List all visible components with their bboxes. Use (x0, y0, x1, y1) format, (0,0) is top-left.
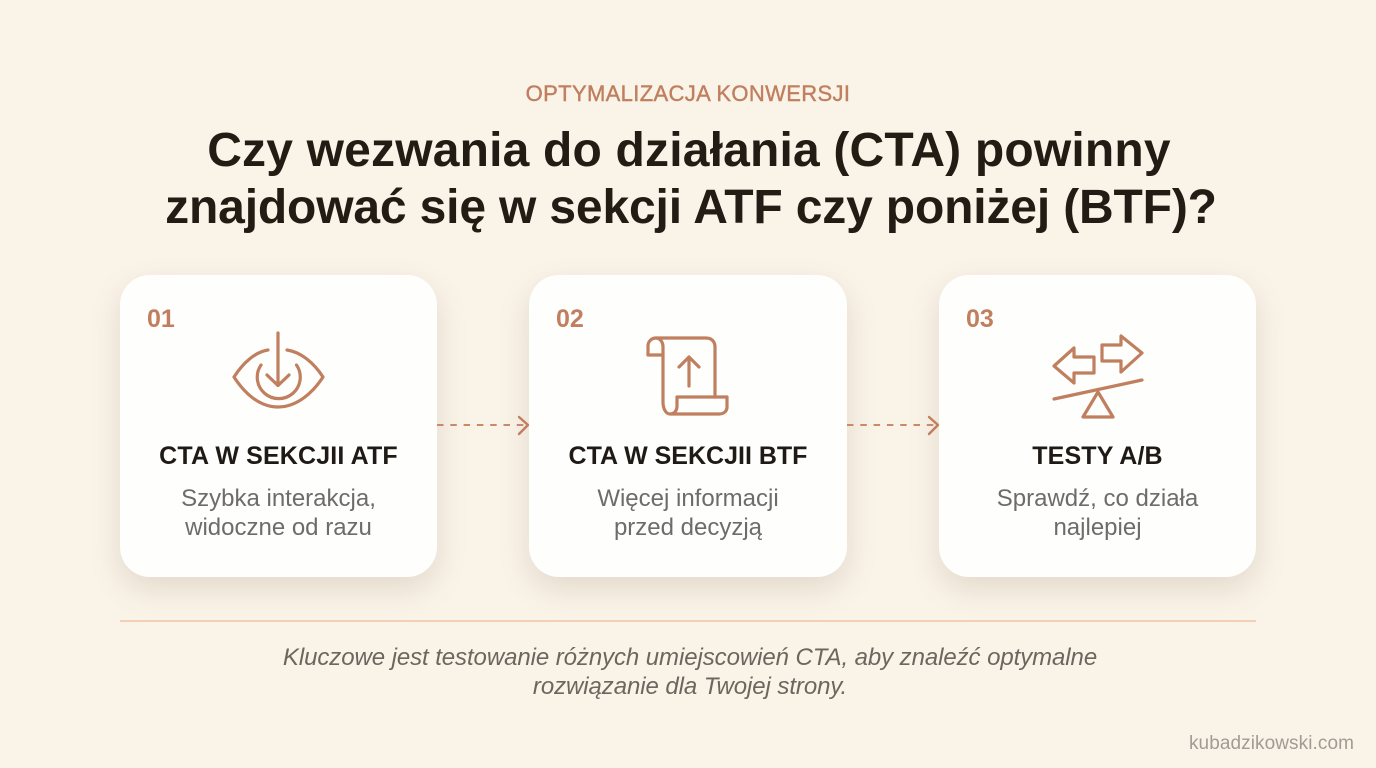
card description BTF: Więcej informacji (597, 485, 779, 512)
eyebrow label: OPTYMALIZACJA KONWERSJI (526, 81, 850, 106)
step number 03: 03 (966, 305, 994, 333)
title (165, 124, 1217, 234)
card heading A/B: TESTY A/B (1032, 442, 1163, 470)
card description BTF (597, 485, 779, 541)
card heading BTF: CTA W SEKCJII BTF (569, 442, 807, 470)
card description A/B: Sprawdź, co działa (997, 485, 1198, 512)
closing note (283, 644, 1097, 700)
card description ATF (181, 485, 376, 541)
panel: testy A/B (939, 275, 1256, 577)
step number 01: 01 (147, 305, 175, 333)
card description ATF: Szybka interakcja, (181, 485, 376, 512)
card description A/B: najlepiej (1053, 514, 1142, 541)
title: Czy wezwania do działania (CTA) powinny (207, 124, 1171, 177)
icon: eye with down arrow (232, 331, 325, 409)
card description A/B (997, 485, 1198, 541)
title: znajdować się w sekcji ATF czy poniżej (BTF)? (165, 181, 1217, 234)
arrow: BTF to testy (847, 416, 940, 436)
icon: balance with arrows (1052, 334, 1144, 419)
card description ATF: widoczne od razu (185, 514, 372, 541)
arrow: ATF to BTF (437, 416, 530, 436)
panel: CTA ATF (120, 275, 437, 577)
closing note: rozwiązanie dla Twojej strony. (533, 673, 847, 700)
watermark: kubadzikowski.com (1189, 733, 1354, 754)
step number 02: 02 (556, 305, 584, 333)
closing note: Kluczowe jest testowanie różnych umiejscowień CTA, aby znaleźć optymalne (283, 644, 1097, 671)
panel: CTA BTF (529, 275, 847, 577)
card heading ATF: CTA W SEKCJII ATF (159, 442, 398, 470)
card description BTF: przed decyzją (614, 514, 762, 541)
icon: scroll with up arrow (646, 336, 729, 416)
